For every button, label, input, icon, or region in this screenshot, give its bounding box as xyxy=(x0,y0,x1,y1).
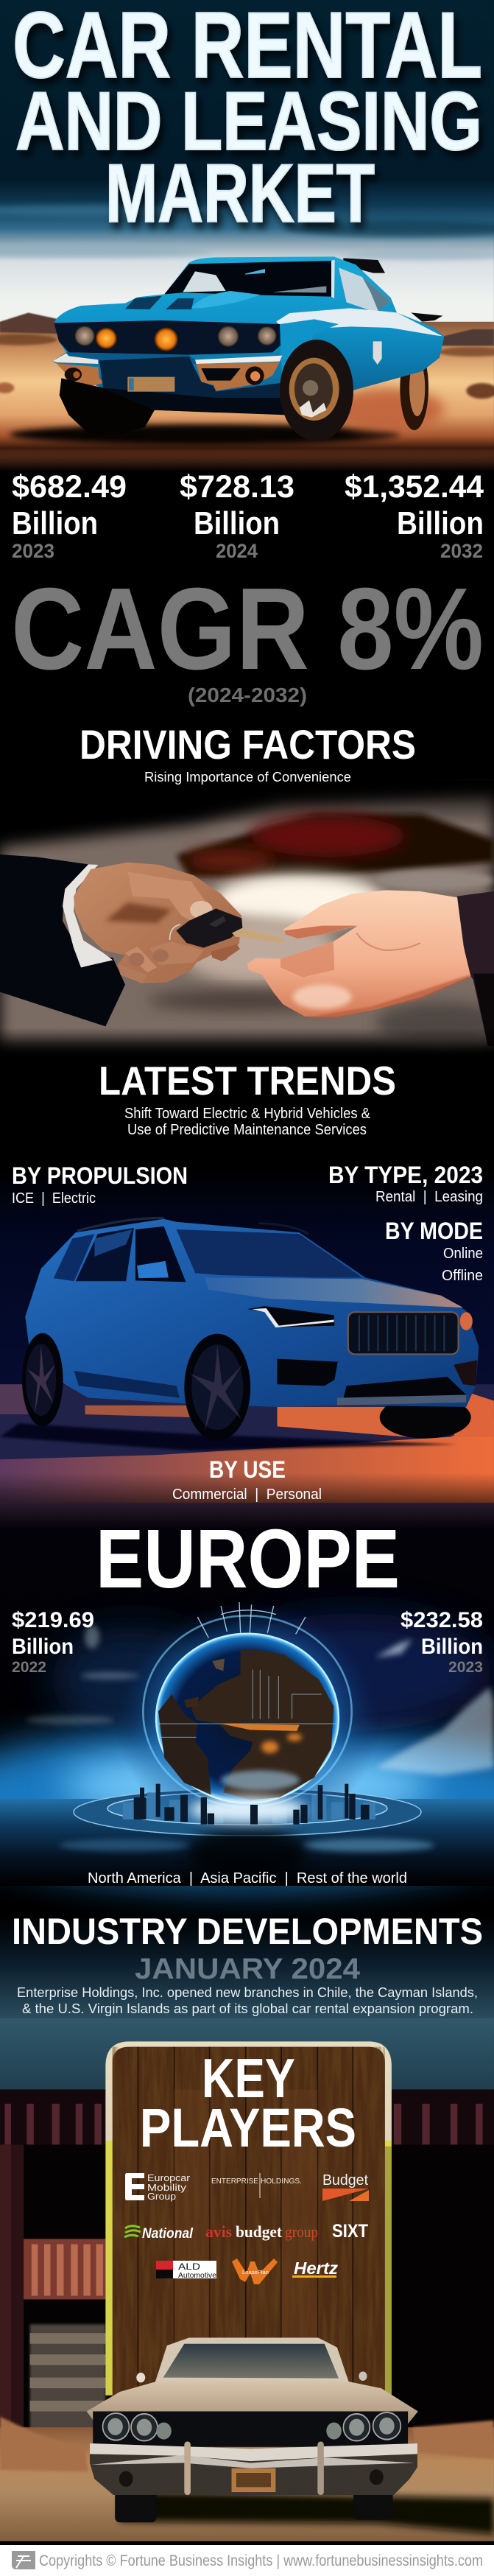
stat: Europe 2023: Billion xyxy=(421,1635,483,1659)
CAGR period: (2024-2032) xyxy=(188,684,307,706)
logo: Budget: Budget xyxy=(322,2172,368,2189)
suit sleeve xyxy=(0,854,125,1026)
skyline xyxy=(123,1784,375,1825)
segment: by mode: BY MODE xyxy=(385,1218,483,1244)
footer strip xyxy=(0,2545,494,2576)
segment: by use xyxy=(172,1456,322,1503)
key ring xyxy=(170,924,180,940)
stat: 2023 market size xyxy=(12,469,127,562)
logo: Enterprise Holdings: ENTERPRISE xyxy=(211,2177,258,2186)
segment: by mode: Online xyxy=(443,1246,483,1262)
heading: key players: KEY xyxy=(202,2047,295,2109)
title: MARKET xyxy=(105,147,375,239)
stat: Europe 2023: $232.58 xyxy=(401,1608,483,1632)
heading: driving factors: DRIVING FACTORS xyxy=(80,721,416,768)
shirt cuff xyxy=(63,864,113,967)
icon: blue SUV xyxy=(22,1218,479,1441)
text: other regions: North America | Asia Pacific | Rest of the world xyxy=(88,1870,407,1887)
fade from key photo to trends band xyxy=(0,1028,494,1057)
logo: LeasePlan: LeasePlan xyxy=(242,2269,269,2275)
text: driving factor detail: Rising Importance of Convenience xyxy=(144,770,351,785)
stat: 2023 market size: Billion xyxy=(12,505,98,541)
stat: Europe 2022: $219.69 xyxy=(12,1608,94,1632)
panel: blurred showroom background xyxy=(0,781,494,1046)
icon: right hand and sleeve xyxy=(247,890,494,1046)
stat: 2023 market size: $682.49 xyxy=(12,469,127,505)
text: development date: JANUARY 2024 xyxy=(135,1953,361,1985)
stat: 2032 market size xyxy=(345,469,484,562)
logo: avis budget group: budget xyxy=(236,2222,283,2241)
building backdrop xyxy=(0,2090,494,2431)
logo: Enterprise Holdings xyxy=(211,2173,302,2198)
wooden sign board xyxy=(105,2041,392,2396)
segment: by use: BY USE xyxy=(209,1456,286,1483)
segment: by propulsion: ICE | Electric xyxy=(12,1190,96,1207)
segment: by type: BY TYPE, 2023 xyxy=(328,1162,483,1188)
stat: Europe 2022 xyxy=(12,1608,94,1676)
stat: 2023 market size: 2023 xyxy=(12,540,54,562)
logo: Hertz: Hertz xyxy=(294,2259,339,2278)
segment: by mode xyxy=(385,1218,483,1284)
heading: Europe: EUROPE xyxy=(96,1512,400,1605)
text: development detail xyxy=(17,1985,478,2016)
text: development detail: & the U.S. Virgin Islands as part of its global car rental expansion program. xyxy=(22,2001,473,2016)
logo: LeasePlan xyxy=(232,2259,278,2284)
orange lit floor xyxy=(0,1384,494,1517)
stat: 2024 market size: Billion xyxy=(194,505,280,541)
logo: ALD Automotive: ALD xyxy=(178,2263,200,2272)
heading: latest trends: LATEST TRENDS xyxy=(99,1058,396,1103)
logo: ALD Automotive: Automotive xyxy=(178,2272,216,2280)
key fob xyxy=(176,908,242,948)
ground xyxy=(0,2417,494,2541)
logo: National: National xyxy=(142,2226,194,2242)
fade from hero into black stats band xyxy=(0,451,494,471)
segment: by type xyxy=(328,1162,483,1205)
logo: avis budget group: group xyxy=(285,2222,318,2241)
logo: Enterprise Holdings: HOLDINGS. xyxy=(261,2177,302,2186)
panel: hero background xyxy=(0,0,494,472)
stat: 2024 market size: $728.13 xyxy=(180,469,294,505)
heading: key players xyxy=(140,2047,356,2158)
stat: Europe 2022: Billion xyxy=(12,1635,74,1659)
title xyxy=(13,0,482,239)
stat: Europe 2023: 2023 xyxy=(448,1659,483,1676)
panel: latest trends with blue SUV xyxy=(0,1056,494,1517)
icon: classic cream car xyxy=(87,2338,418,2522)
stat: 2032 market size: Billion xyxy=(397,505,484,541)
heading: key players: PLAYERS xyxy=(140,2097,356,2158)
logo: Europcar Mobility Group: Group xyxy=(147,2191,176,2202)
stat: Europe 2023 xyxy=(401,1608,483,1676)
icon: glowing globe xyxy=(116,1601,381,1836)
text: trends detail xyxy=(124,1106,371,1138)
logo: National xyxy=(124,2226,194,2242)
logo: Europcar Mobility Group: Europcar xyxy=(147,2173,190,2183)
stat: 2032 market size: $1,352.44 xyxy=(345,469,484,505)
panel: Europe globe background xyxy=(0,1503,494,2033)
stat: 2032 market size: 2032 xyxy=(440,540,483,562)
text: trends detail: Use of Predictive Maintenance Services xyxy=(127,1122,367,1138)
logo: ALD Automotive xyxy=(156,2261,216,2280)
text: development detail: Enterprise Holdings, Inc. opened new branches in Chile, the Cayman Islands, xyxy=(17,1985,478,2000)
segment: by type: Rental | Leasing xyxy=(375,1189,483,1205)
logo: avis budget group xyxy=(205,2222,318,2241)
segment: by propulsion xyxy=(12,1162,188,1207)
hand xyxy=(74,863,241,983)
icon: blue muscle car xyxy=(53,256,444,441)
clouds xyxy=(26,1625,494,1775)
segment: by use: Commercial | Personal xyxy=(172,1487,322,1503)
logo: Europcar Mobility Group xyxy=(125,2173,190,2202)
icon: left hand with suit and key fob xyxy=(0,854,285,1026)
panel: key players scene xyxy=(0,2018,494,2541)
stat: 2024 market size xyxy=(180,469,294,562)
text: trends detail: Shift Toward Electric & Hybrid Vehicles & xyxy=(124,1106,371,1122)
logo: Sixt: SIXT xyxy=(332,2221,368,2242)
key blade xyxy=(232,928,285,944)
stat: 2024 market size: 2024 xyxy=(216,540,258,562)
logo: avis budget group: avis xyxy=(205,2222,232,2241)
icon: Fortune Business Insights logo xyxy=(12,2551,35,2569)
logo: Europcar Mobility Group: Mobility xyxy=(147,2183,187,2193)
logo: Budget xyxy=(322,2172,369,2201)
floor platform xyxy=(0,1789,494,1886)
stat: Europe 2022: 2022 xyxy=(12,1659,46,1676)
segment: by propulsion: BY PROPULSION xyxy=(12,1162,188,1189)
segment: by mode: Offline xyxy=(442,1268,483,1284)
